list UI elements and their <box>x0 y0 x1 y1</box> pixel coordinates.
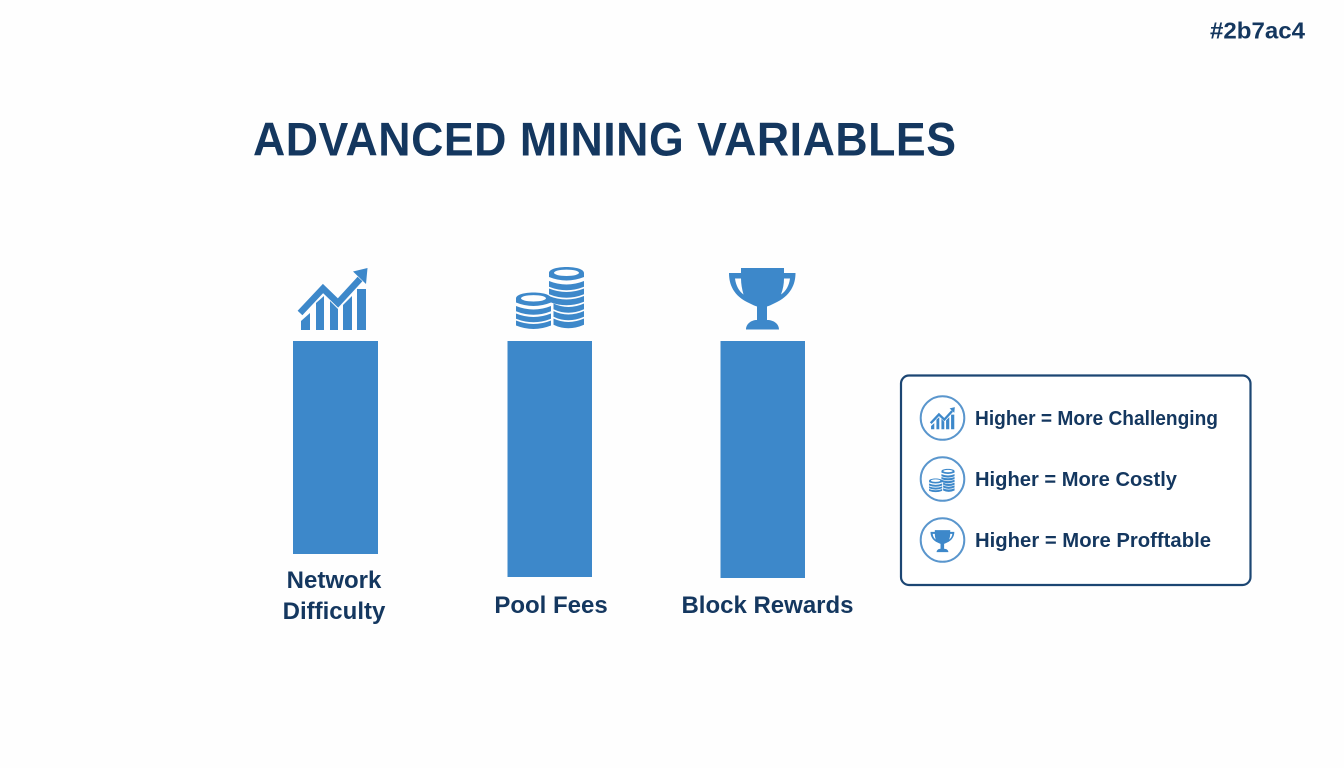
legend text: challenging: Higher = More Challenging <box>975 407 1218 430</box>
legend frame <box>901 376 1250 585</box>
legend text: costly: Higher = More Costly <box>975 468 1178 491</box>
panel: legend <box>901 376 1250 585</box>
column: network difficulty <box>283 268 386 625</box>
bar: pool fees <box>508 341 592 577</box>
label: pool fees: Pool Fees <box>494 592 608 619</box>
title: ADVANCED MINING VARIABLES <box>253 114 956 166</box>
label: block rewards: Block Rewards <box>681 592 854 619</box>
icon: trophy badge <box>921 518 964 562</box>
bar: block rewards <box>720 341 805 578</box>
icon: coins badge <box>921 457 964 501</box>
legend row: challenging <box>921 396 1218 440</box>
column: block rewards <box>681 268 854 619</box>
icon: rising chart <box>300 268 368 330</box>
icon: coin stacks <box>516 267 584 329</box>
legend row: costly <box>921 457 1178 501</box>
legend text: profitable: Higher = More Profftable <box>975 529 1211 552</box>
icon: trophy <box>729 268 796 330</box>
label: network difficulty: Difficulty <box>283 598 386 625</box>
icon: chart badge <box>921 396 964 440</box>
bar: network difficulty <box>293 341 378 554</box>
legend row: profitable <box>921 518 1211 562</box>
hex code label: #2b7ac4 <box>1210 18 1305 44</box>
label: network difficulty: Network <box>287 567 382 594</box>
column: pool fees <box>494 267 608 619</box>
